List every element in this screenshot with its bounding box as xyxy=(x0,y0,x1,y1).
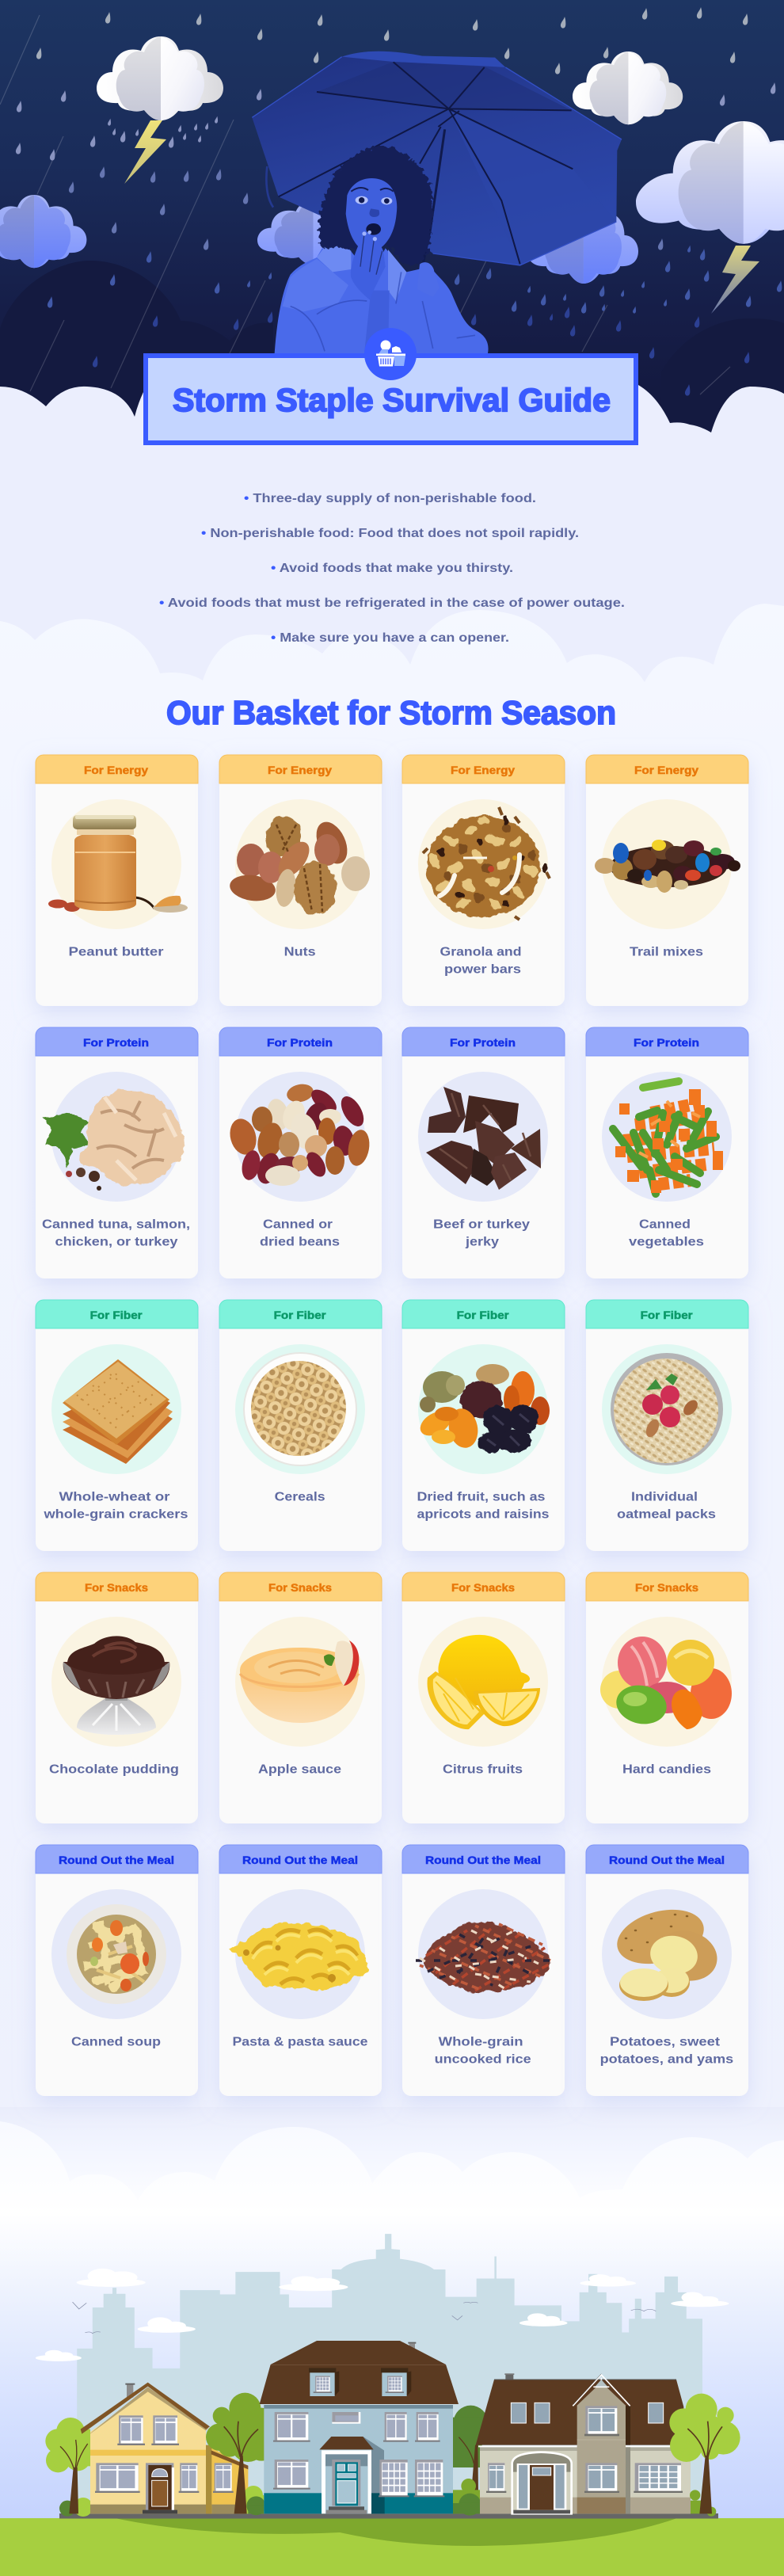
card: dried fruit: Dried fruit, such as xyxy=(417,1491,545,1503)
icon: wild rice xyxy=(416,1922,551,1992)
card: apple sauce: For Snacks xyxy=(268,1581,332,1594)
card: rice: uncooked rice xyxy=(435,2053,531,2066)
hair xyxy=(318,147,432,265)
umbrella and woman xyxy=(252,51,622,353)
card: rice: Whole-grain xyxy=(439,2036,523,2048)
bushes xyxy=(244,2486,265,2515)
handle xyxy=(412,288,428,307)
title box xyxy=(146,356,636,443)
card: canned tuna: chicken, or turkey xyxy=(55,1236,178,1248)
card: nuts xyxy=(219,755,382,1006)
dark hills xyxy=(0,261,784,444)
icon: potatoes xyxy=(611,1901,723,2001)
card: trail mixes xyxy=(586,755,748,1006)
card: rice: Round Out the Meal xyxy=(425,1854,541,1866)
icon: beans xyxy=(226,1082,372,1187)
card: beans: Canned or xyxy=(263,1218,333,1231)
ground xyxy=(0,2513,784,2576)
blue house xyxy=(260,2341,459,2513)
icon: peanut butter jar xyxy=(48,815,188,913)
icon: trail mix xyxy=(595,840,740,893)
card: citrus fruits: Citrus fruits xyxy=(443,1763,523,1776)
icon: macaroni xyxy=(229,1923,369,1991)
card: nuts: Nuts xyxy=(284,946,316,958)
card: peanut butter: For Energy xyxy=(84,764,148,776)
tree: back dark xyxy=(453,2406,488,2516)
card: beans: For Protein xyxy=(267,1036,333,1049)
card: dried fruit xyxy=(402,1300,565,1551)
yellow house xyxy=(81,2383,248,2513)
icon: cereal bowl xyxy=(244,1353,356,1465)
small white clouds xyxy=(36,2269,729,2361)
beige house xyxy=(476,2373,691,2513)
paper cloud: top right xyxy=(573,51,683,124)
card: trail mixes: For Energy xyxy=(634,764,698,776)
card: potatoes xyxy=(586,1845,748,2096)
icon: granola xyxy=(423,807,550,920)
icon: crackers xyxy=(63,1359,173,1464)
hero: storm scene xyxy=(0,0,784,713)
card: cereals: For Fiber xyxy=(274,1309,326,1321)
card: trail mixes: Trail mixes xyxy=(630,946,703,958)
icon: beef jerky xyxy=(426,1087,541,1190)
icon: apple sauce bowl xyxy=(240,1640,359,1723)
paper cloud: top left xyxy=(97,36,223,120)
card: oatmeal: oatmeal packs xyxy=(617,1508,716,1521)
bullet list: • Avoid foods that make you thirsty. xyxy=(271,562,513,575)
paper cloud: big right xyxy=(636,121,784,244)
card: granola: power bars xyxy=(444,963,521,976)
card: jerky xyxy=(402,1027,565,1278)
card: crackers: whole-grain crackers xyxy=(43,1508,188,1521)
card: apple sauce xyxy=(219,1572,382,1823)
birds xyxy=(73,2302,656,2334)
card: peanut butter xyxy=(36,755,198,1006)
card: canned tuna xyxy=(36,1027,198,1278)
bullet list xyxy=(159,492,625,645)
bullet list: • Make sure you have a can opener. xyxy=(271,631,509,645)
card: canned tuna: Canned tuna, salmon, xyxy=(42,1218,190,1231)
raindrops: middle band xyxy=(69,166,663,250)
card: potatoes: Round Out the Meal xyxy=(609,1854,725,1866)
card: rice xyxy=(402,1845,565,2096)
card: granola xyxy=(402,755,565,1006)
houses: left half xyxy=(45,2341,459,2517)
card: canned tuna: For Protein xyxy=(83,1036,149,1049)
card: jerky: jerky xyxy=(465,1236,499,1248)
title: Storm Staple Survival Guide xyxy=(173,382,611,418)
card: cereals xyxy=(219,1300,382,1551)
lightning bolt left xyxy=(124,120,166,184)
icon: dried fruit xyxy=(416,1364,550,1453)
raindrops: top band xyxy=(36,7,748,74)
lower sky xyxy=(0,2107,784,2523)
face xyxy=(346,178,397,252)
card: dried fruit: For Fiber xyxy=(457,1309,509,1321)
lower cloud band xyxy=(0,2121,784,2215)
card: oatmeal: Individual xyxy=(631,1491,698,1503)
card: oatmeal xyxy=(586,1300,748,1551)
icon: mixed nuts xyxy=(228,816,370,915)
card: dried fruit: apricots and raisins xyxy=(417,1508,550,1521)
card: canned vegetables: For Protein xyxy=(634,1036,699,1049)
section heading: Our Basket for Storm Season xyxy=(166,694,616,731)
card: canned vegetables: vegetables xyxy=(629,1236,704,1248)
card: canned vegetables xyxy=(586,1027,748,1278)
card: cereals: Cereals xyxy=(275,1491,325,1503)
icon: chocolate pudding xyxy=(63,1636,169,1735)
tree: front middle xyxy=(206,2393,276,2513)
card: pasta: Pasta & pasta sauce xyxy=(233,2036,368,2048)
card: chocolate pudding: For Snacks xyxy=(85,1581,148,1594)
card: chocolate pudding: Chocolate pudding xyxy=(49,1763,179,1776)
paper cloud: left blue xyxy=(0,195,86,268)
icon: tuna with parsley xyxy=(44,1090,185,1191)
card: canned soup: Canned soup xyxy=(71,2036,161,2048)
tree: front right xyxy=(669,2394,740,2517)
card: hard candies xyxy=(586,1572,748,1823)
cloud band xyxy=(0,385,784,713)
icon: carrots and beans xyxy=(613,1081,723,1194)
card: hard candies: Hard candies xyxy=(622,1763,711,1776)
card: citrus fruits: For Snacks xyxy=(451,1581,515,1594)
night sky xyxy=(0,0,784,444)
hand xyxy=(351,231,386,299)
icon: soup bowl xyxy=(67,1904,166,2004)
lightning bolt right xyxy=(711,246,759,314)
card: peanut butter: Peanut butter xyxy=(68,946,163,958)
icon: oatmeal bowl xyxy=(611,1353,723,1465)
card: hard candies: For Snacks xyxy=(635,1581,698,1594)
bullet list: • Avoid foods that must be refrigerated in the case of power outage. xyxy=(159,596,625,610)
bullet list: • Three-day supply of non-perishable food. xyxy=(244,492,536,505)
raindrops: lower band xyxy=(48,246,782,314)
tree: back left xyxy=(45,2418,93,2517)
paper cloud: behind umbrella xyxy=(527,200,638,284)
card: canned soup xyxy=(36,1845,198,2096)
jacket xyxy=(275,242,489,353)
card: citrus fruits xyxy=(402,1572,565,1823)
card: potatoes: Potatoes, sweet xyxy=(610,2036,720,2048)
card: jerky: For Protein xyxy=(450,1036,516,1049)
card: potatoes: potatoes, and yams xyxy=(600,2053,733,2066)
card: crackers: Whole-wheat or xyxy=(59,1491,169,1503)
city skyline xyxy=(36,2234,729,2513)
card: granola: Granola and xyxy=(440,946,521,958)
card: chocolate pudding xyxy=(36,1572,198,1823)
card: canned vegetables: Canned xyxy=(639,1218,691,1231)
icon: grocery basket xyxy=(364,328,417,380)
card: crackers: For Fiber xyxy=(90,1309,143,1321)
second cloud layer xyxy=(0,604,784,2139)
rain streaks xyxy=(0,15,730,394)
bullet list: • Non-perishable food: Food that does not spoil rapidly. xyxy=(201,527,579,540)
raindrops: upper band xyxy=(16,82,775,161)
card: granola: For Energy xyxy=(451,764,515,776)
card: jerky: Beef or turkey xyxy=(433,1218,530,1231)
card: beans: dried beans xyxy=(260,1236,340,1248)
card: apple sauce: Apple sauce xyxy=(258,1763,341,1776)
paper cloud: behind woman xyxy=(257,200,333,265)
card: pasta xyxy=(219,1845,382,2096)
icon: hard candies xyxy=(600,1637,732,1729)
card: pasta: Round Out the Meal xyxy=(242,1854,358,1866)
houses: right half xyxy=(453,2373,740,2517)
icon: lemons xyxy=(428,1635,540,1729)
umbrella xyxy=(252,51,622,267)
card: beans xyxy=(219,1027,382,1278)
card: crackers xyxy=(36,1300,198,1551)
card: canned soup: Round Out the Meal xyxy=(59,1854,174,1866)
card: oatmeal: For Fiber xyxy=(641,1309,693,1321)
card: nuts: For Energy xyxy=(268,764,332,776)
raindrops: bottom band xyxy=(93,307,749,396)
